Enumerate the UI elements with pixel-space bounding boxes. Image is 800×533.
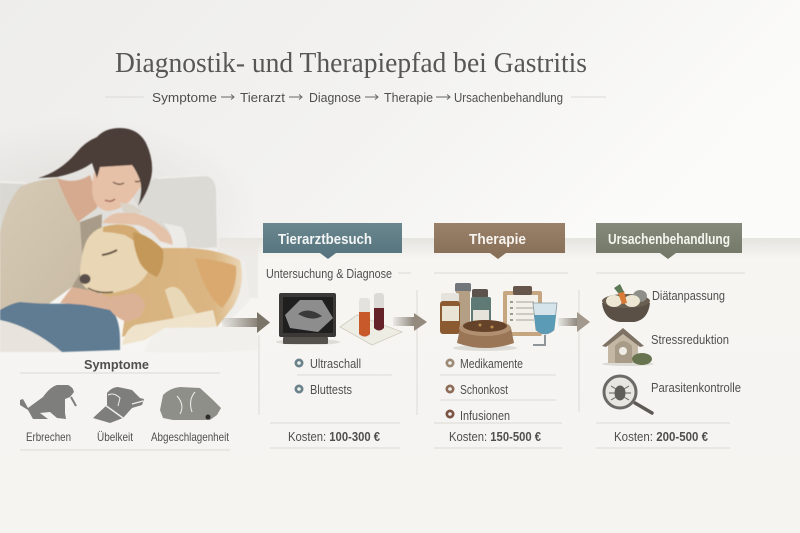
panel: Tierarztbesuch <box>259 223 427 448</box>
icon: tired dog <box>160 387 221 420</box>
list item: Medikamente: Medikamente <box>460 356 523 371</box>
icon: medicine bottles <box>440 283 491 334</box>
subtitle: pathway steps: Therapie <box>384 90 433 105</box>
icon: clipboard checklist <box>503 286 542 336</box>
woman's face <box>92 162 143 211</box>
subtitle: pathway steps: Symptome <box>152 90 217 105</box>
list item: Ultraschall: Ultraschall <box>310 356 361 371</box>
icon: food bowl <box>453 320 517 351</box>
icon: vomiting dog <box>20 385 76 419</box>
dog paw <box>122 310 217 345</box>
arrow: Tierarztbesuch to Therapie <box>393 313 427 331</box>
label: Diätanpassung: Diätanpassung <box>652 288 725 303</box>
subtitle: pathway steps: Diagnose <box>309 90 361 105</box>
woman's neck <box>57 175 98 222</box>
list item: Medikamente <box>446 356 523 371</box>
ribbon heading: Therapie <box>434 223 565 259</box>
ribbon heading: Tierarztbesuch: Tierarztbesuch <box>278 231 372 248</box>
icon: ultrasound monitor <box>276 293 340 345</box>
panel: Therapie <box>434 223 590 448</box>
list item: Ultraschall <box>294 356 361 371</box>
woman's upper arm and hand on head <box>102 213 173 245</box>
icon: infusion glass <box>533 303 557 345</box>
dog head <box>80 224 152 293</box>
arrow: Therapie to Ursachenbehandlung <box>558 312 590 332</box>
woman's hair <box>38 128 152 206</box>
label: Übelkeit: Übelkeit <box>97 430 134 444</box>
upper sleeve <box>163 223 187 248</box>
dog ear <box>133 232 163 277</box>
list item: Schonkost: Schonkost <box>460 382 508 397</box>
list item: Schonkost <box>446 382 508 397</box>
panel: Ursachenbehandlung <box>596 223 745 448</box>
label: Parasitenkontrolle: Parasitenkontrolle <box>651 380 741 395</box>
sweater sleeve by shoulder <box>120 203 143 216</box>
subtitle: pathway steps: Tierarzt <box>240 90 285 105</box>
woman's front arm and hand <box>60 287 145 322</box>
photo: woman cuddling golden retriever on sofa <box>0 128 258 353</box>
subtitle: pathway steps: Ursachenbehandlung <box>454 90 563 105</box>
icon: diet bowl <box>602 284 650 322</box>
label: Erbrechen: Erbrechen <box>26 430 71 444</box>
list item: Bluttests: Bluttests <box>310 382 352 397</box>
ribbon heading: Ursachenbehandlung <box>596 223 742 259</box>
list item: Infusionen: Infusionen <box>460 408 510 423</box>
woman's sweater <box>0 178 100 312</box>
ribbon heading: Tierarztbesuch <box>263 223 402 259</box>
subheading: Untersuchung & Diagnose <box>266 267 392 281</box>
cost: 150-500 euro: Kosten: 150-500 € <box>449 430 541 444</box>
sofa and cushions <box>0 175 258 353</box>
ribbon heading: Therapie: Therapie <box>469 231 526 248</box>
arrow: photo to Tierarztbesuch <box>222 312 270 333</box>
label: Abgeschlagenheit: Abgeschlagenheit <box>151 430 230 444</box>
list item: Infusionen <box>446 408 510 423</box>
sweater shaded front <box>62 214 102 303</box>
subtitle: pathway steps <box>105 90 606 105</box>
cost: 200-500 euro: Kosten: 200-500 € <box>614 430 708 444</box>
ribbon heading: Ursachenbehandlung: Ursachenbehandlung <box>608 231 730 248</box>
jeans <box>0 302 120 352</box>
list item: Bluttests <box>294 382 352 397</box>
panel: Symptome <box>20 357 230 450</box>
title: Diagnostik- und Therapiepfad bei Gastritis <box>115 47 587 79</box>
icon: magnifier with parasite <box>604 376 652 413</box>
icon: blood tubes on paper <box>340 293 402 345</box>
label: Stressreduktion: Stressreduktion <box>651 332 729 347</box>
dog body <box>100 232 242 337</box>
icon: nauseous dog <box>93 387 144 423</box>
icon: dog house <box>602 328 654 366</box>
cost: 100-300 euro: Kosten: 100-300 € <box>288 430 380 444</box>
heading: Symptome: Symptome <box>84 357 149 372</box>
dog nose and eye <box>80 250 117 292</box>
